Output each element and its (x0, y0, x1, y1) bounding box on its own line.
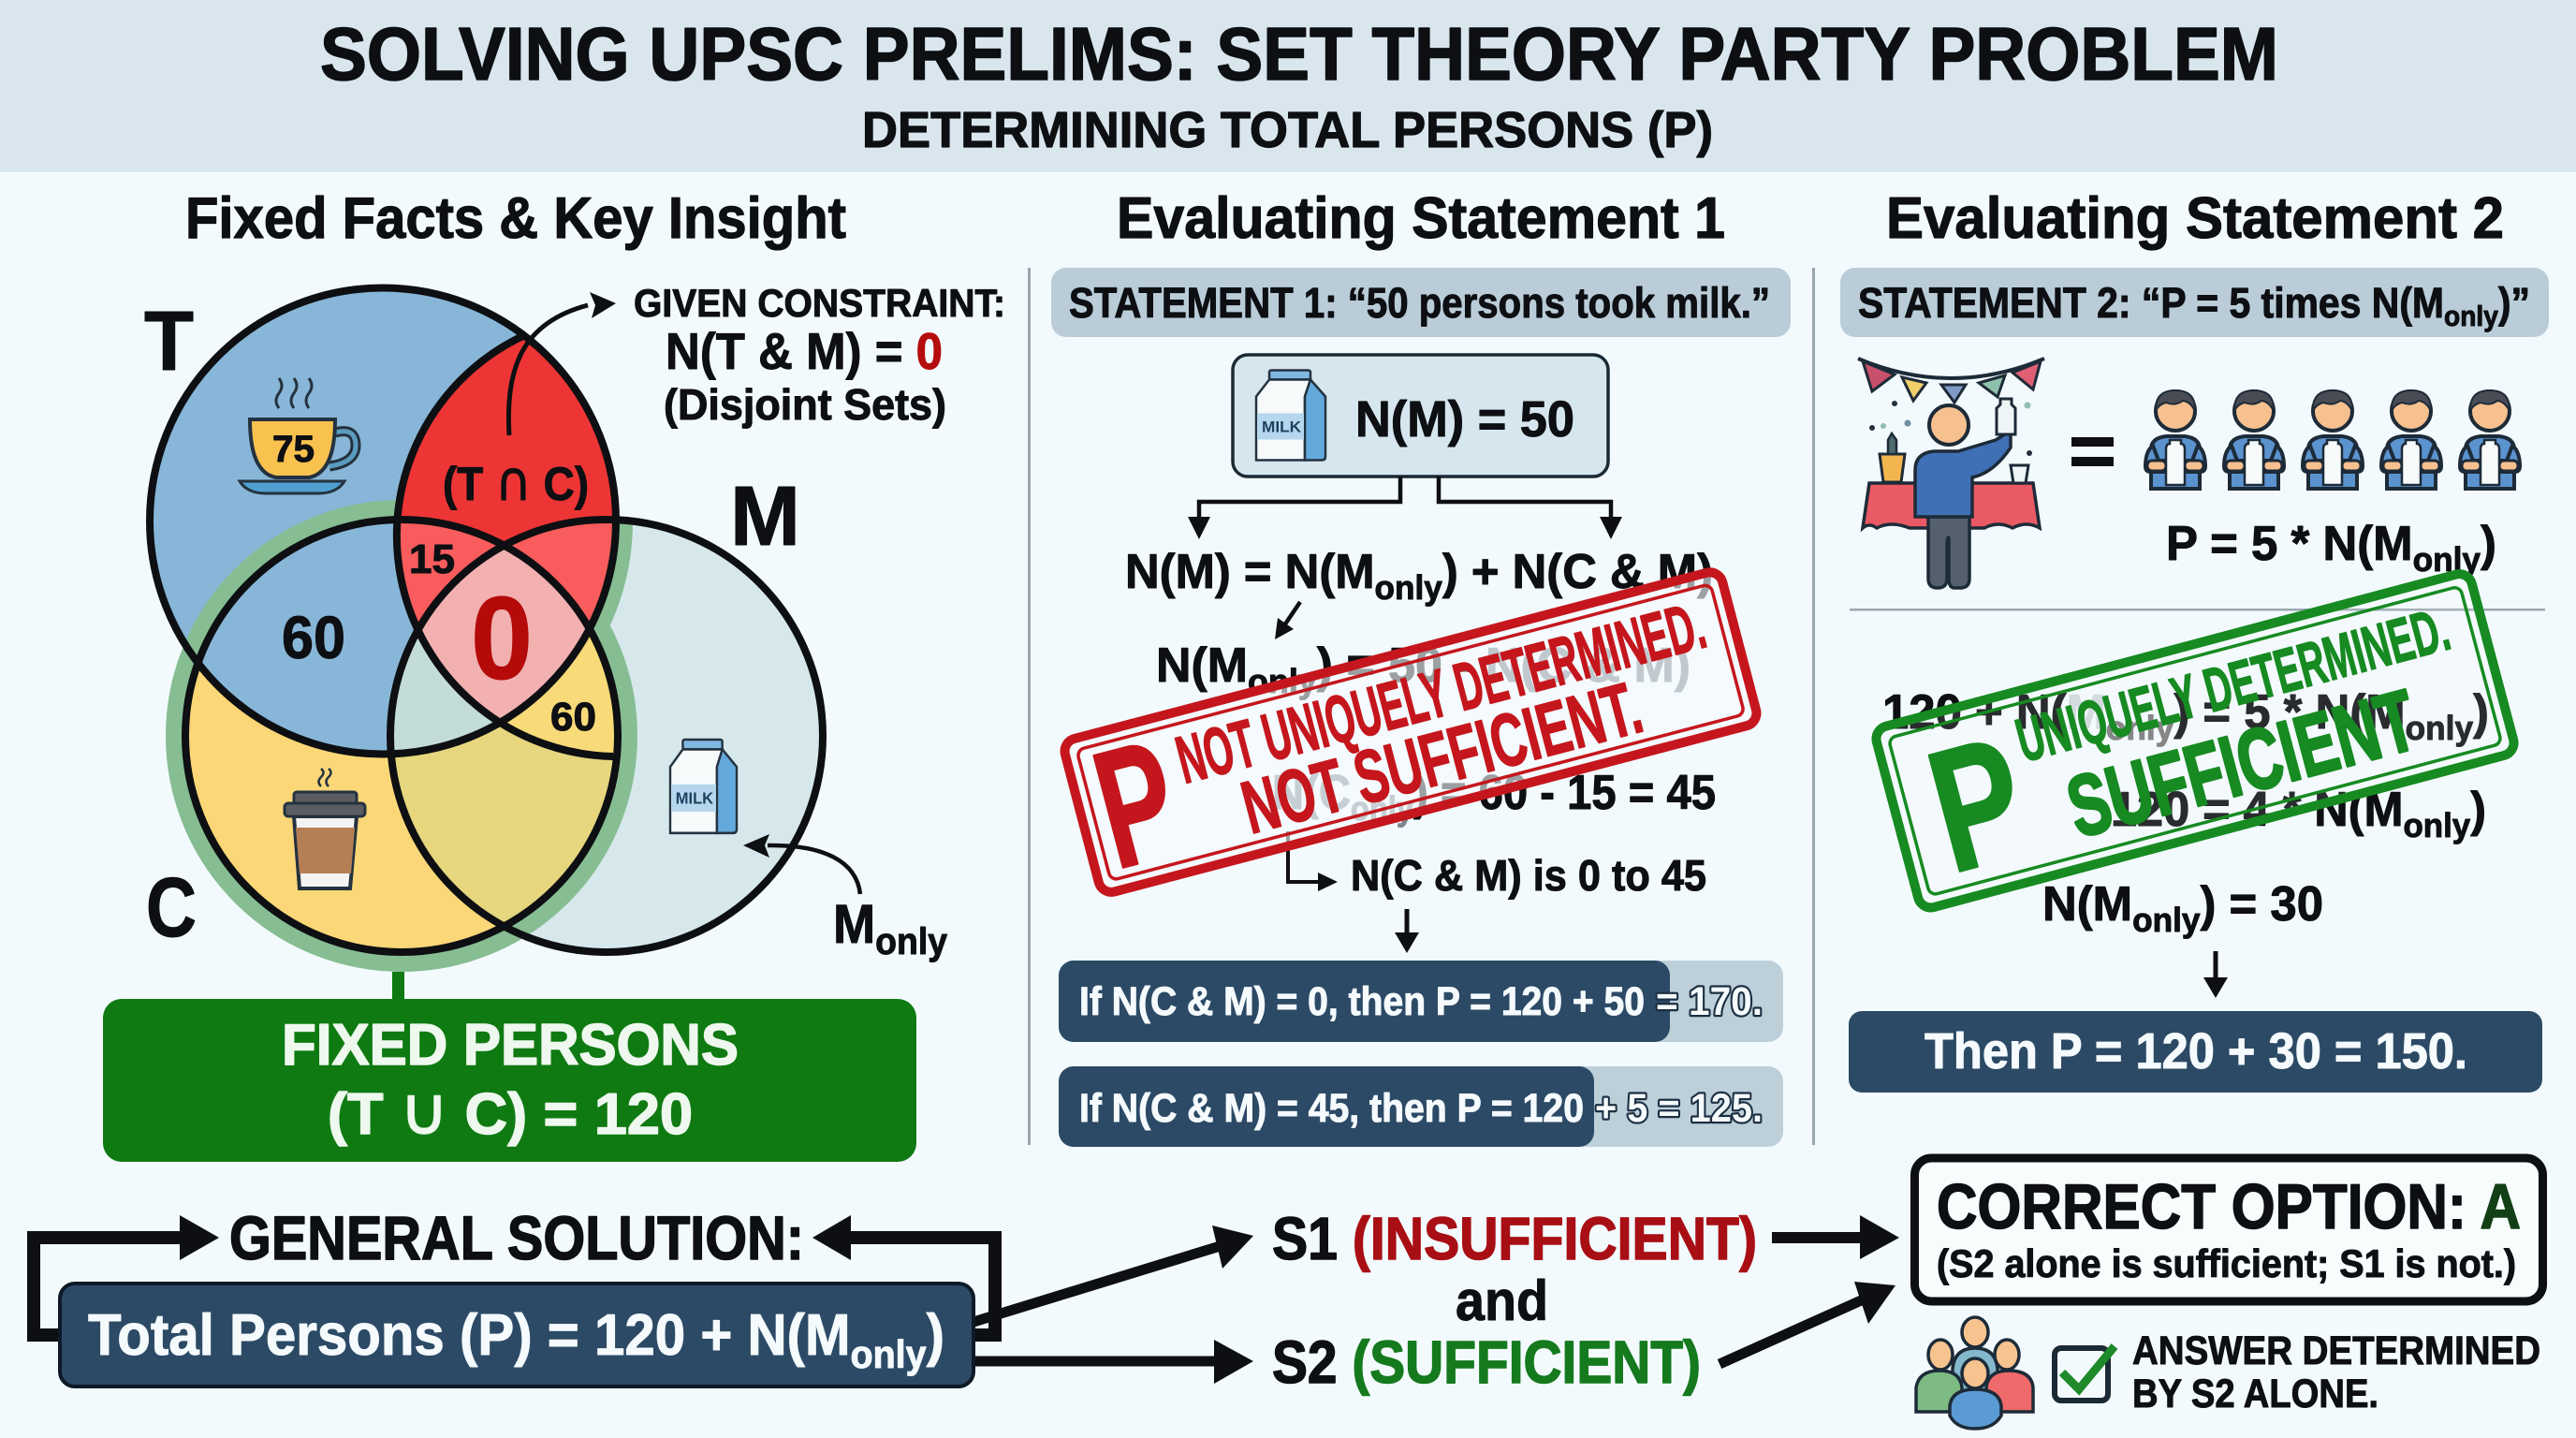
box: N(M) = 50 (1233, 355, 1608, 477)
text: answer determined (2132, 1328, 2540, 1416)
text: range of N(C and M): N(C & M) is 0 to 45 (1351, 851, 1706, 900)
value 60 tea and coffee: 60 (282, 604, 345, 671)
equation: P = 5 times N(M only): ) (2481, 517, 2496, 571)
equation: N(M only): N(M (1156, 638, 1248, 693)
box: N(M) = 50: N(M) = 50 (1355, 391, 1574, 448)
equation: 120 + N(M only): only (2106, 709, 2174, 747)
divider inside statement 2 (1850, 609, 2545, 610)
heading: fixed facts: Fixed Facts & Key Insight (185, 186, 846, 251)
case bar: N(C and M) = 45 (1059, 1066, 1783, 1147)
callout: given constraint: GIVEN CONSTRAINT: (634, 281, 1005, 325)
icon: tea cup with 75 (240, 378, 356, 493)
callout: fixed persons: FIXED PERSONS (282, 1013, 739, 1078)
arrow: split right (1439, 477, 1622, 539)
verdict: S1 insufficient: S1 (INSUFFICIENT) (1272, 1205, 1757, 1272)
statement 1 bar: STATEMENT 1: “50 persons took milk.” (1069, 279, 1770, 327)
callout: given constraint (634, 281, 1005, 429)
stamp: not sufficient: P (1077, 704, 1195, 905)
panel: evaluating statement 2 (1840, 186, 2549, 1093)
equation: N(M) breakdown: only (1375, 568, 1442, 607)
equation: P = 5 times N(M only): P = 5 * N(M (2166, 517, 2418, 571)
arrow: S2 to answer (1720, 1282, 1895, 1364)
subtitle: DETERMINING TOTAL PERSONS (P) (862, 102, 1713, 158)
equation: N(M) breakdown: N(M) = N(M (1125, 545, 1381, 599)
equation: N(C only): ) = 60 - 15 = 45 (1413, 766, 1716, 820)
box: total persons formula: Total Persons (P) = 120 + N(M (88, 1303, 900, 1368)
icon: green check box (2055, 1346, 2115, 1401)
equation: N(M only) = 30: ) = 30 (2200, 877, 2323, 932)
case bar: N(C and M) = 0 (1059, 961, 1783, 1042)
panel: evaluating statement 1 (1051, 186, 1791, 1147)
case bar: N(C and M) = 45: + 5 = 125. (1595, 1086, 1763, 1131)
box: total persons formula: ) (927, 1303, 944, 1368)
box: total persons formula (60, 1284, 973, 1387)
case bar: N(C and M) = 45: If N(C & M) = 45, then P = 120 (1079, 1086, 1584, 1131)
label: T intersect C: (T ∩ C) (443, 449, 589, 513)
panel: fixed facts and key insight (103, 186, 1005, 1162)
result bar: Then P = 120 + 30 = 150. (1925, 1023, 2467, 1079)
panel: general solution and conclusion (34, 1158, 2542, 1429)
arrow: to S2 (973, 1340, 1253, 1384)
equation: 120 + N(M only): 120 + N(M (1882, 685, 2107, 740)
arrow: to S1 (973, 1225, 1253, 1322)
label: M only: only (875, 921, 948, 962)
statement 2 bar: STATEMENT 2: “P = 5 times N(M (1858, 279, 2503, 327)
equation: 120 = 4 times N(M only): only (2403, 806, 2470, 844)
arrow: split left (1188, 477, 1400, 539)
arrow: to given constraint (508, 292, 616, 435)
equation: N(C only): only (1351, 789, 1413, 828)
equation: P = 5 times N(M only): only (2413, 540, 2481, 579)
panel divider left (1028, 268, 1031, 1145)
result bar (1849, 1011, 2542, 1093)
stamp: sufficient: P (1911, 700, 2044, 910)
set label M: M (730, 470, 800, 564)
icon: party host with milk (1858, 359, 2044, 588)
connector: venn to fixed persons (392, 972, 404, 1002)
text: answer determined: ANSWER DETERMINED (2132, 1328, 2540, 1373)
icon: milk carton in M only: MILK (676, 789, 714, 808)
stamp: sufficient: SUFFICIENT (2057, 672, 2426, 856)
title: SOLVING UPSC PRELIMS: SET THEORY PARTY PROBLEM (320, 12, 2278, 95)
icon: milk carton in M only (670, 740, 737, 833)
box: correct option (1915, 1158, 2542, 1301)
venn diagram (150, 288, 839, 963)
equation: N(M only) = 30: N(M (2042, 877, 2134, 932)
loop arrow right (812, 1215, 995, 1335)
equation: N(M) breakdown: ) + N(C & M) (1442, 545, 1713, 599)
arrow: down to cases (1395, 909, 1419, 953)
statement 2 bar: )” (2498, 279, 2530, 327)
icon: group of people (1916, 1317, 2033, 1429)
statement 2 bar (1840, 268, 2549, 337)
stamp: sufficient (1873, 571, 2519, 919)
equation: N(M only) = 30: only (2132, 901, 2200, 939)
box: correct option: CORRECT OPTION: A (1937, 1171, 2521, 1242)
arrow: down to result (2203, 951, 2228, 998)
set label T: T (144, 295, 194, 389)
equation: 120 + N(M only): ) = 5 * N(M (2174, 685, 2406, 740)
text: answer determined: BY S2 ALONE. (2132, 1372, 2378, 1416)
callout: fixed persons: (T ∪ C) = 120 (328, 1073, 693, 1150)
equation: N(C only): N(C (1272, 766, 1351, 820)
set label C: C (146, 861, 197, 955)
stamp: not sufficient: NOT UNIQUELY DETERMINED. (1169, 588, 1713, 799)
icon: milk carton (1256, 371, 1325, 461)
equation: 120 = 4 times N(M only): ) (2470, 783, 2486, 837)
text: and: and (1456, 1269, 1548, 1332)
equation: 120 + N(M only): ) (2473, 685, 2489, 740)
equation: N(M only): N(C & M) (1486, 638, 1690, 693)
value 15: 15 (409, 536, 455, 582)
value 75: 75 (272, 429, 315, 470)
panel divider right (1812, 268, 1815, 1145)
box: total persons formula: only (850, 1332, 927, 1376)
equation: 120 + N(M only): only (2406, 709, 2473, 747)
label: M only: M (833, 894, 878, 955)
equation: 120 = 4 times N(M only): 120 = 4 * N(M (2111, 783, 2412, 837)
case bar: N(C and M) = 0: = 170. (1656, 979, 1763, 1024)
equation: N(M only): ) = 50 - (1317, 638, 1486, 693)
callout: given constraint: N(T & M) = 0 (666, 322, 943, 380)
verdict: S2 sufficient: S2 (SUFFICIENT) (1272, 1328, 1701, 1396)
header band (0, 0, 2576, 172)
arrow: elbow to range (1288, 831, 1338, 891)
value 0: 0 (471, 574, 533, 704)
case bar: N(C and M) = 0: If N(C & M) = 0, then P = 120 + 50 (1079, 979, 1645, 1024)
icon: takeaway coffee cup (285, 769, 365, 888)
statement 1 bar (1051, 268, 1791, 337)
callout: fixed persons (103, 999, 916, 1162)
arrow: small diagonal (1275, 602, 1300, 639)
icon: five milk drinkers (2145, 390, 2520, 489)
stamp: not sufficient: NOT SUFFICIENT. (1234, 666, 1650, 849)
statement 2 bar: only (2444, 300, 2499, 332)
box: correct option: (S2 alone is sufficient; S1 is not.) (1937, 1241, 2516, 1285)
loop arrow left (34, 1215, 219, 1335)
icon: milk carton: MILK (1262, 418, 1302, 436)
stamp: not sufficient (1059, 555, 1764, 910)
equals sign (2071, 437, 2114, 466)
equation: N(M only): only (1248, 662, 1317, 700)
heading: general solution: GENERAL SOLUTION: (229, 1203, 804, 1272)
callout: given constraint: (Disjoint Sets) (664, 380, 946, 429)
heading: statement 2: Evaluating Statement 2 (1886, 186, 2504, 251)
arrow: M only pointer (743, 834, 860, 894)
heading: statement 1: Evaluating Statement 1 (1117, 186, 1725, 251)
value 60 coffee and milk: 60 (550, 695, 596, 740)
arrow: S1 to answer (1772, 1215, 1899, 1259)
